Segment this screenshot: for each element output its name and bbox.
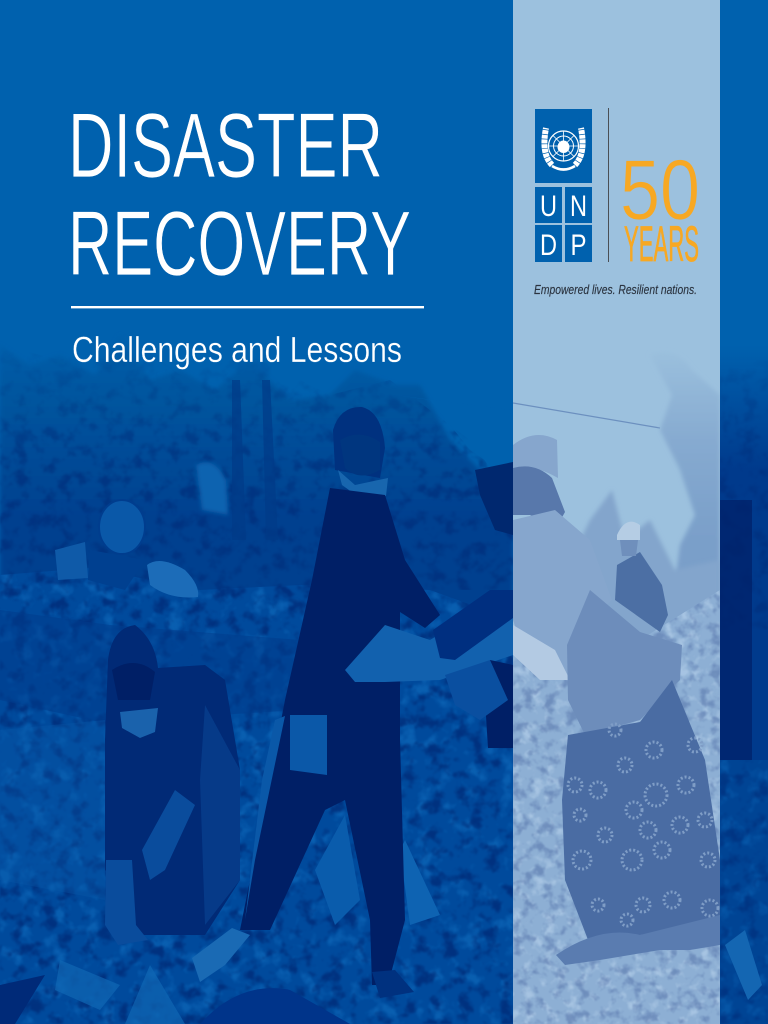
ground rubble — [0, 560, 513, 1024]
pale vertical band — [513, 0, 720, 1024]
band tree — [660, 380, 720, 590]
bags on the mound — [55, 500, 198, 598]
subtitle: Challenges and Lessons — [72, 329, 402, 370]
forest — [0, 354, 513, 604]
background worker — [615, 552, 668, 632]
letter tile U: U — [540, 190, 557, 223]
title — [68, 95, 411, 295]
icon: UN emblem — [544, 128, 583, 170]
flower pattern — [568, 724, 718, 926]
tagline: Empowered lives. Resilient nations. — [534, 282, 697, 297]
emblem tile — [535, 109, 592, 183]
50 years mark: 50 — [620, 143, 700, 238]
50 years mark — [620, 143, 700, 272]
letter tile N: N — [570, 190, 587, 223]
title: RECOVERY — [68, 193, 411, 295]
band rubble — [513, 590, 720, 1024]
logo divider — [608, 108, 609, 262]
letter tile P — [565, 225, 592, 262]
crouching woman — [105, 625, 240, 945]
band wire — [513, 403, 660, 428]
hard hat and hair — [513, 435, 558, 478]
photo: workers clearing rubble — [0, 335, 513, 1024]
letter tile D: D — [540, 229, 557, 262]
title: DISASTER — [68, 95, 383, 197]
feet and shadow — [556, 915, 720, 965]
right edge photo strip — [720, 345, 768, 1024]
skirt — [562, 680, 720, 945]
letter tile P: P — [570, 229, 586, 262]
title rule — [71, 306, 424, 308]
shawl — [567, 590, 682, 735]
right woman arm and face — [345, 462, 513, 748]
shirt — [513, 510, 584, 674]
UNDP logo — [535, 109, 592, 262]
band distant trees — [582, 492, 716, 634]
band photo — [513, 352, 720, 1024]
standing woman — [192, 407, 440, 998]
